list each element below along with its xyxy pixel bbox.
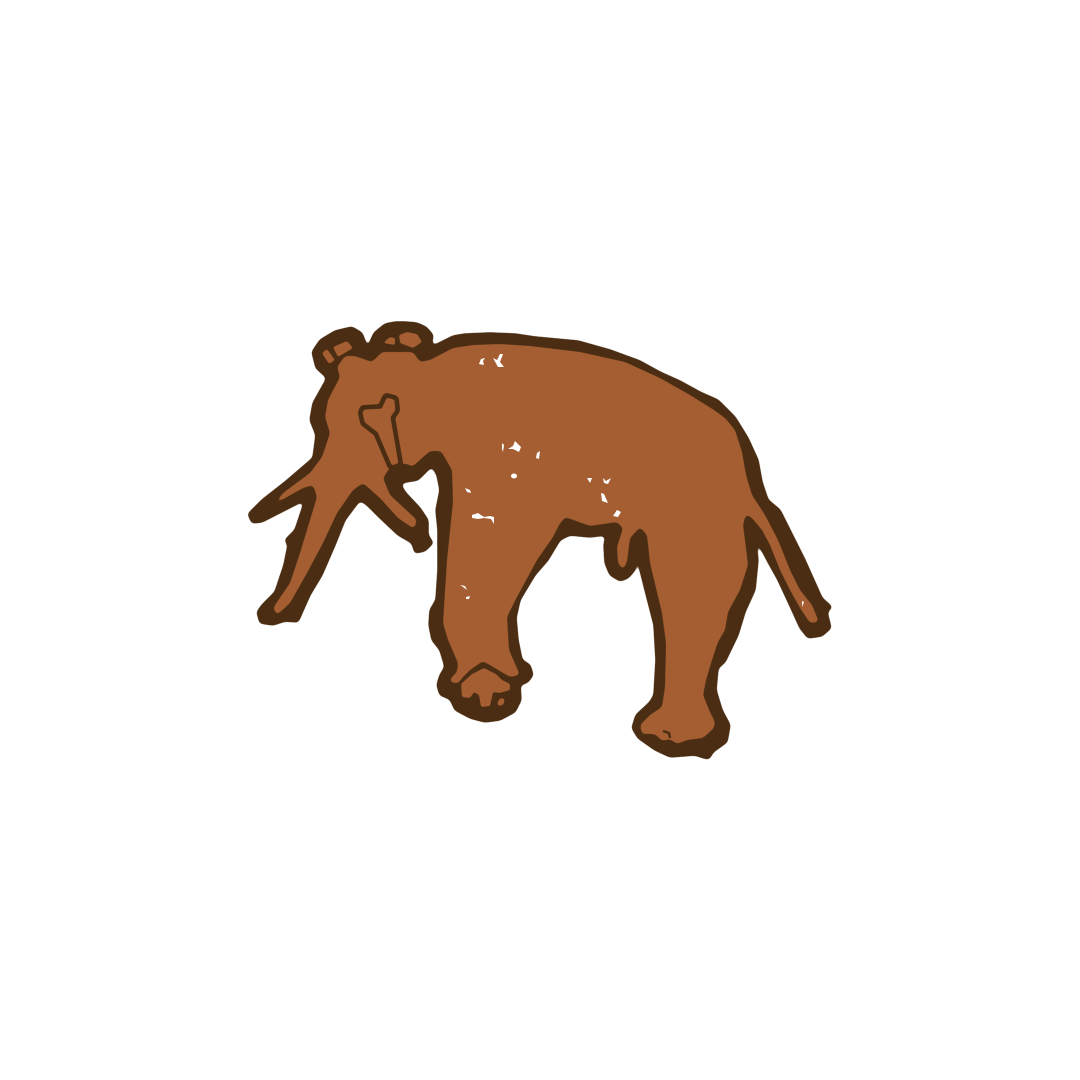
hind foot toe mark xyxy=(663,731,670,738)
ear bone outline xyxy=(363,398,398,465)
front foot dark toe band xyxy=(461,668,510,707)
elephant outline silhouette xyxy=(248,322,832,759)
ear detail: left cells xyxy=(322,341,353,364)
illustration: elephant xyxy=(248,322,832,759)
ear bone fill xyxy=(363,398,398,465)
front foot toe oval xyxy=(496,697,506,707)
front foot toes xyxy=(461,668,510,707)
ear detail: right cells xyxy=(383,332,422,348)
elephant body fill xyxy=(273,344,819,744)
white flecks xyxy=(460,354,804,607)
